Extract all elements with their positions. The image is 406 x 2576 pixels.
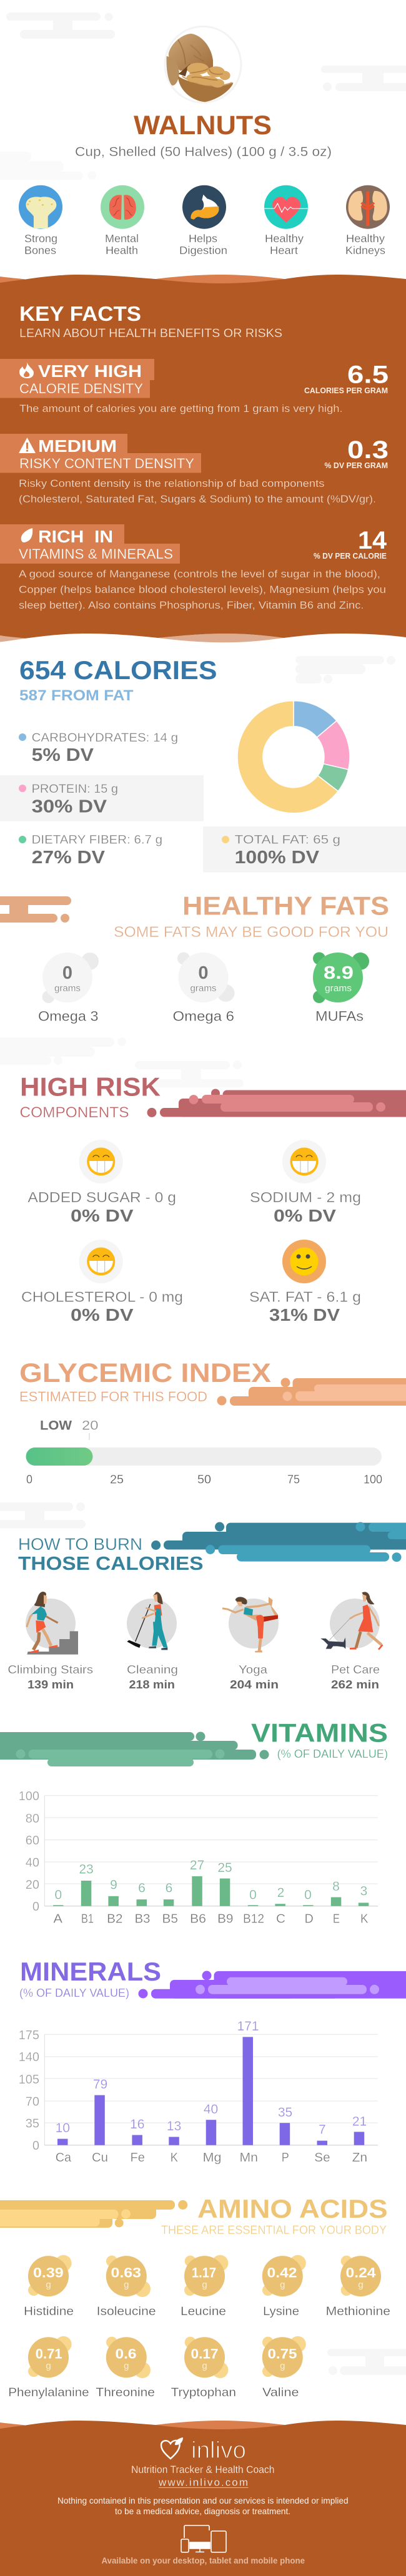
bar chart: vitamins: 100 [19, 1790, 39, 1803]
fact: calorie density: CALORIE DENSITY [19, 381, 143, 396]
bar chart: vitamins: 40 [26, 1856, 39, 1870]
heading: calories: 587 FROM FAT [19, 687, 134, 704]
footer tagline: Nutrition Tracker & Health Coach [131, 2464, 275, 2476]
bar chart: minerals: 70 [26, 2095, 39, 2109]
risk: cholesterol: CHOLESTEROL - 0 mg [21, 1289, 183, 1305]
glycemic index gauge [26, 1447, 382, 1487]
bar chart: vitamins: B6 [190, 1912, 206, 1926]
icon: helps digestion: Helps [189, 232, 217, 245]
heading: vitamins: (% OF DAILY VALUE) [277, 1747, 388, 1760]
stat: MUFAs: 8.9 [324, 963, 354, 983]
serving size subtitle: Cup, Shelled (50 Halves) (100 g / 3.5 oz) [75, 144, 332, 159]
bar chart: minerals: 40 [204, 2102, 218, 2117]
disclaimer: to be a medical advice, diagnosis or treatment. [115, 2506, 290, 2516]
stat: MUFAs: MUFAs [315, 1009, 364, 1024]
bar chart: minerals: 79 [93, 2077, 107, 2092]
heading: healthy fats: HEALTHY FATS [182, 891, 389, 921]
amino: threonine: 0.6 [115, 2346, 136, 2362]
bar chart: vitamins: B9 [217, 1912, 234, 1926]
panel: glycemic index [19, 1358, 406, 1487]
icon: healthy heart: Healthy [265, 232, 304, 245]
legend: carbohydrates: 5% DV [32, 745, 94, 765]
stat: omega 3: 0 [62, 963, 72, 983]
health benefit icons row [19, 185, 390, 257]
amino: isoleucine: Isoleucine [97, 2305, 156, 2318]
logo: inlivo [161, 2437, 246, 2464]
bar chart: vitamins: 20 [26, 1878, 39, 1892]
panel: high risk components [0, 1037, 406, 1325]
bar chart: vitamins: 0 [304, 1888, 312, 1903]
fact: rich in vitamins and minerals: Copper (helps balance blood cholesterol levels), Magnesium (helps you [19, 584, 386, 595]
risk: sodium: SODIUM - 2 mg [250, 1189, 361, 1205]
icon: woman in yoga pose [222, 1597, 278, 1652]
legend: carbohydrates [19, 732, 178, 765]
bar chart: vitamins: 6 [166, 1881, 172, 1896]
heading: how to burn those calories: HOW TO BURN [18, 1535, 142, 1554]
heading: amino acids: THESE ARE ESSENTIAL FOR YOUR BODY [161, 2224, 387, 2237]
bar chart: vitamins: 0 [54, 1888, 62, 1903]
disclaimer [57, 2495, 349, 2516]
bar chart: minerals: Se [314, 2151, 330, 2165]
icon: woman climbing stairs [27, 1592, 78, 1655]
fact: risky content density: Risky Content density is the relationship of bad components [19, 477, 325, 489]
risk: sodium: 0% DV [274, 1206, 336, 1225]
amino: valine [262, 2336, 306, 2399]
heading: high risk [20, 1072, 161, 1121]
heading: vitamins: VITAMINS [251, 1718, 388, 1748]
legend: protein: 30% DV [32, 797, 107, 817]
risk: saturated fat: SAT. FAT - 6.1 g [249, 1289, 361, 1305]
risk: added sugar [27, 1140, 176, 1225]
bar chart: minerals: 16 [130, 2117, 144, 2132]
glycemic value label: 20 [82, 1419, 99, 1433]
amino: tryptophan: Tryptophan [171, 2386, 236, 2399]
bar chart: vitamins: 25 [217, 1861, 232, 1875]
icon: healthy heart [264, 185, 308, 257]
stat: omega 3: Omega 3 [38, 1009, 99, 1024]
glycemic index gauge: 50 [197, 1474, 211, 1487]
glycemic index gauge: 100 [364, 1474, 382, 1487]
background clouds: header [0, 12, 406, 180]
fact: calorie density: VERY HIGH [38, 361, 142, 381]
bar chart: minerals: 21 [352, 2115, 367, 2129]
heading: glycemic index: GLYCEMIC INDEX [19, 1358, 271, 1388]
bar chart: vitamins: B12 [243, 1912, 264, 1926]
amino: methionine: g [358, 2280, 364, 2290]
amino: leucine: Leucine [181, 2305, 226, 2318]
icon: smiling face [290, 1247, 319, 1276]
heading: minerals [19, 1957, 161, 1999]
heading: healthy fats [114, 891, 389, 941]
heading: glycemic index: ESTIMATED FOR THIS FOOD [19, 1389, 207, 1404]
heading: key facts [19, 302, 282, 340]
bar chart: minerals: 10 [56, 2121, 70, 2135]
fact: calorie density [0, 359, 389, 414]
fact: rich in vitamins and minerals [0, 524, 387, 611]
bar chart: vitamins: B1 [81, 1912, 94, 1926]
icon: healthy kidneys: Healthy [346, 232, 385, 245]
activity: climbing stairs: 139 min [27, 1678, 74, 1691]
fact: risky content density [0, 434, 389, 505]
legend: dietary fiber [19, 834, 162, 868]
bar chart: vitamins: 0 [32, 1900, 39, 1914]
bar chart: minerals: 7 [319, 2123, 326, 2137]
bar chart: vitamins: 60 [26, 1834, 39, 1848]
icon: mental health: Mental [105, 232, 139, 245]
amino: methionine: 0.24 [346, 2265, 376, 2281]
legend: protein: PROTEIN: 15 g [32, 783, 118, 796]
amino: methionine [326, 2256, 390, 2318]
fact: risky content density: 0.3 [347, 436, 389, 464]
icon: warning triangle [19, 438, 36, 453]
bar chart: minerals: 0 [32, 2139, 39, 2153]
activity: cleaning: 218 min [129, 1678, 175, 1691]
fact: rich in vitamins and minerals: sleep better). Also contains Phosphorus, Fiber, Vitamin B6 and Zinc. [19, 599, 364, 611]
bar chart: vitamins: B2 [107, 1912, 122, 1926]
stat: omega 6: Omega 6 [172, 1009, 234, 1024]
legend: total fat [203, 826, 406, 873]
activity: pet care [320, 1592, 383, 1691]
bar chart: minerals: Mn [240, 2151, 258, 2165]
decoration: amino acids cloud [0, 2200, 187, 2228]
activity: yoga [222, 1597, 279, 1691]
icon: flame [19, 362, 34, 378]
activity: yoga: Yoga [239, 1663, 268, 1676]
amino: methionine: Methionine [326, 2305, 390, 2318]
icon: grinning face [87, 1247, 115, 1276]
activity: cleaning [127, 1592, 178, 1691]
decoration: healthy fats cloud [0, 896, 71, 923]
stat: omega 3 [38, 953, 99, 1024]
bar chart: minerals: P [282, 2151, 289, 2165]
donut chart [237, 701, 350, 813]
risk: saturated fat [249, 1240, 361, 1325]
bar chart: vitamins: 80 [26, 1812, 39, 1826]
icon: woman sweeping [127, 1592, 167, 1650]
bar chart: vitamins: 8 [332, 1879, 340, 1894]
legend: total fat: TOTAL FAT: 65 g [235, 834, 340, 847]
legend: dietary fiber: DIETARY FIBER: 6.7 g [32, 834, 162, 847]
heading: amino acids [161, 2194, 388, 2237]
title: WALNUTS [134, 110, 272, 140]
bar chart: minerals: Zn [352, 2151, 367, 2165]
activity: pet care: Pet Care [331, 1663, 380, 1676]
icon: strong bones: Bones [24, 244, 56, 257]
amino: phenylalanine: g [46, 2361, 51, 2371]
disclaimer: Nothing contained in this presentation and our services is intended or implied [57, 2495, 349, 2505]
fact: risky content density: MEDIUM [38, 436, 117, 456]
amino: phenylalanine: 0.71 [36, 2346, 62, 2362]
amino: leucine: 1.17 [192, 2265, 216, 2281]
panel: calories [0, 655, 406, 873]
amino: histidine: g [46, 2280, 51, 2290]
fact: risky content density: % DV PER GRAM [325, 461, 388, 470]
activity: climbing stairs: Climbing Stairs [7, 1663, 93, 1676]
legend: dietary fiber: 27% DV [32, 848, 106, 868]
amino: histidine: 0.39 [33, 2265, 64, 2281]
bar chart: minerals: Ca [56, 2151, 72, 2165]
activity: pet care: 262 min [331, 1678, 379, 1691]
heading: amino acids: AMINO ACIDS [197, 2194, 388, 2223]
decoration: high risk cloud [147, 1089, 406, 1117]
risk: added sugar: 0% DV [71, 1206, 134, 1225]
logo: inlivo: inlivo [191, 2437, 246, 2464]
glycemic value label: LOW [40, 1419, 72, 1433]
amino: isoleucine [97, 2256, 156, 2318]
heading: how to burn those calories: THOSE CALORIES [18, 1552, 204, 1574]
bar chart: minerals: 35 [26, 2117, 39, 2131]
bar chart: vitamins: 9 [110, 1878, 117, 1893]
heading: healthy fats: SOME FATS MAY BE GOOD FOR YOU [114, 924, 389, 941]
bar chart: minerals: 171 [237, 2019, 259, 2034]
amino: tryptophan: 0.17 [191, 2346, 219, 2362]
heading: high risk: HIGH RISK [20, 1072, 161, 1101]
bar chart: vitamins: 0 [249, 1888, 257, 1903]
fact: risky content density: (Cholesterol, Saturated Fat, Sugars & Sodium) to the amount (%DV/gr). [19, 493, 376, 505]
panel: minerals [19, 1957, 406, 2165]
bar chart: minerals: Mg [203, 2151, 221, 2165]
heading: minerals: MINERALS [20, 1957, 161, 1986]
fact: risky content density: RISKY CONTENT DENSITY [19, 456, 194, 471]
stat: omega 6: grams [190, 983, 216, 994]
bar chart: vitamins [19, 1790, 378, 1926]
stat: MUFAs [313, 953, 369, 1024]
legend: protein [0, 775, 204, 821]
icon: devices [181, 2525, 226, 2552]
bar chart: minerals: 105 [19, 2073, 39, 2087]
decoration: burn cloud [151, 1522, 406, 1562]
amino: isoleucine: 0.63 [111, 2265, 141, 2281]
risk: saturated fat: 31% DV [269, 1305, 340, 1325]
amino: threonine [96, 2337, 155, 2399]
bar chart: minerals: K [171, 2151, 179, 2165]
fact: calorie density: CALORIES PER GRAM [304, 386, 388, 395]
icon: grinning face [87, 1147, 115, 1176]
decoration: vitamins cloud [0, 1731, 269, 1766]
activity: yoga: 204 min [230, 1678, 279, 1691]
bar chart: vitamins: A [53, 1912, 63, 1926]
icon: mental health [101, 185, 144, 257]
fact: rich in vitamins and minerals: A good source of Manganese (controls the level of sugar in the blood), [19, 568, 380, 580]
bar chart: vitamins: 6 [138, 1881, 146, 1896]
legend: total fat: 100% DV [235, 848, 320, 868]
bar chart: minerals: Cu [92, 2151, 108, 2165]
available on devices note: Available on your desktop, tablet and mobile phone [101, 2555, 305, 2565]
amino: phenylalanine [8, 2336, 89, 2399]
icon: healthy kidneys: Kidneys [345, 244, 385, 257]
amino: valine: g [280, 2361, 285, 2371]
fact: rich in vitamins and minerals: RICH IN [38, 527, 113, 546]
panel: vitamins [0, 1718, 388, 1926]
legend: carbohydrates: CARBOHYDRATES: 14 g [32, 732, 178, 745]
stat: omega 3: grams [54, 983, 81, 994]
glycemic index gauge: 75 [287, 1474, 300, 1487]
panel: how to burn calories [0, 1502, 406, 1691]
bar chart: vitamins: K [360, 1912, 369, 1926]
bar chart: vitamins: 3 [360, 1884, 367, 1899]
bar chart: vitamins: B3 [135, 1912, 150, 1926]
icon: strong bones: Strong [24, 232, 57, 245]
bar chart: vitamins: B5 [162, 1912, 178, 1926]
bar chart: vitamins: C [276, 1912, 285, 1926]
stat: MUFAs: grams [325, 983, 352, 994]
amino: phenylalanine: Phenylalanine [8, 2386, 89, 2399]
fact: calorie density: The amount of calories you are getting from 1 gram is very high. [19, 403, 342, 414]
activity: climbing stairs [7, 1592, 93, 1691]
glycemic index gauge: 0 [26, 1474, 32, 1487]
risk: sodium [250, 1140, 361, 1225]
heading: calories [19, 655, 217, 704]
bar chart: minerals: 140 [19, 2050, 39, 2064]
decoration: glycemic cloud [217, 1378, 406, 1406]
bar chart: minerals: 175 [19, 2029, 39, 2042]
amino: threonine: Threonine [96, 2386, 155, 2399]
heading: key facts: LEARN ABOUT HEALTH BENEFITS OR RISKS [19, 326, 282, 340]
bar chart: vitamins: D [305, 1912, 314, 1926]
heading: key facts: KEY FACTS [19, 302, 141, 325]
icon: healthy kidneys [345, 185, 390, 257]
bar chart: vitamins: 2 [277, 1886, 284, 1900]
amino: tryptophan: g [202, 2361, 207, 2371]
icon: woman walking dog [320, 1592, 383, 1650]
panel: footer [0, 2421, 406, 2576]
amino: valine: Valine [262, 2386, 299, 2399]
bar chart: minerals: Fe [130, 2151, 145, 2165]
heading: how to burn those calories [18, 1535, 204, 1574]
decoration: minerals cloud [139, 1971, 406, 1999]
icon: mental health: Health [106, 244, 138, 257]
fact: calorie density: 6.5 [347, 361, 389, 389]
amino: leucine [181, 2255, 228, 2318]
bar chart: vitamins: 27 [190, 1858, 204, 1873]
panel: healthy fats [0, 891, 389, 1024]
bar chart: vitamins: E [333, 1912, 340, 1926]
stat: omega 6: 0 [198, 963, 209, 983]
glycemic index gauge: 25 [110, 1474, 124, 1487]
amino: threonine: g [124, 2361, 129, 2371]
bar chart: minerals: 35 [278, 2105, 292, 2120]
icon: helps digestion: Digestion [179, 244, 227, 257]
amino: lysine: g [280, 2280, 285, 2290]
amino: histidine [24, 2255, 74, 2318]
icon: helps digestion [179, 185, 227, 257]
amino: lysine: 0.42 [267, 2265, 297, 2281]
bar chart: vitamins: 23 [79, 1863, 94, 1877]
bar chart: minerals: 13 [167, 2119, 181, 2133]
stat: omega 6 [172, 953, 235, 1024]
fact: rich in vitamins and minerals: VITAMINS & MINERALS [19, 546, 173, 562]
fact: rich in vitamins and minerals: % DV PER CALORIE [314, 551, 387, 561]
icon: healthy heart: Heart [270, 244, 298, 257]
panel: amino acids [0, 2194, 406, 2399]
panel: key facts [0, 275, 406, 642]
amino: isoleucine: g [124, 2280, 129, 2290]
icon: walnut photo [165, 26, 241, 102]
heading: calories: 654 CALORIES [19, 655, 217, 685]
heading: glycemic index [19, 1358, 271, 1404]
heading: vitamins [251, 1718, 388, 1760]
glycemic value label [40, 1419, 99, 1440]
heading: minerals: (% OF DAILY VALUE) [19, 1986, 129, 1999]
amino: lysine: Lysine [263, 2305, 299, 2318]
icon: grinning face [290, 1147, 319, 1176]
heading: high risk: COMPONENTS [20, 1104, 129, 1121]
amino: tryptophan [171, 2337, 236, 2399]
amino: valine: 0.75 [267, 2346, 297, 2362]
icon: leaf [21, 528, 32, 542]
amino: lysine [262, 2255, 306, 2318]
risk: cholesterol: 0% DV [71, 1305, 134, 1325]
fact: rich in vitamins and minerals: 14 [358, 527, 387, 554]
risk: added sugar: ADDED SUGAR - 0 g [27, 1189, 176, 1205]
activity: cleaning: Cleaning [127, 1663, 178, 1676]
amino: leucine: g [202, 2280, 207, 2290]
risk: cholesterol [21, 1240, 183, 1325]
icon: strong bones [19, 185, 62, 257]
amino: histidine: Histidine [24, 2305, 74, 2318]
footer website link: www.inlivo.com [158, 2477, 248, 2489]
bar chart: minerals [19, 2019, 378, 2165]
